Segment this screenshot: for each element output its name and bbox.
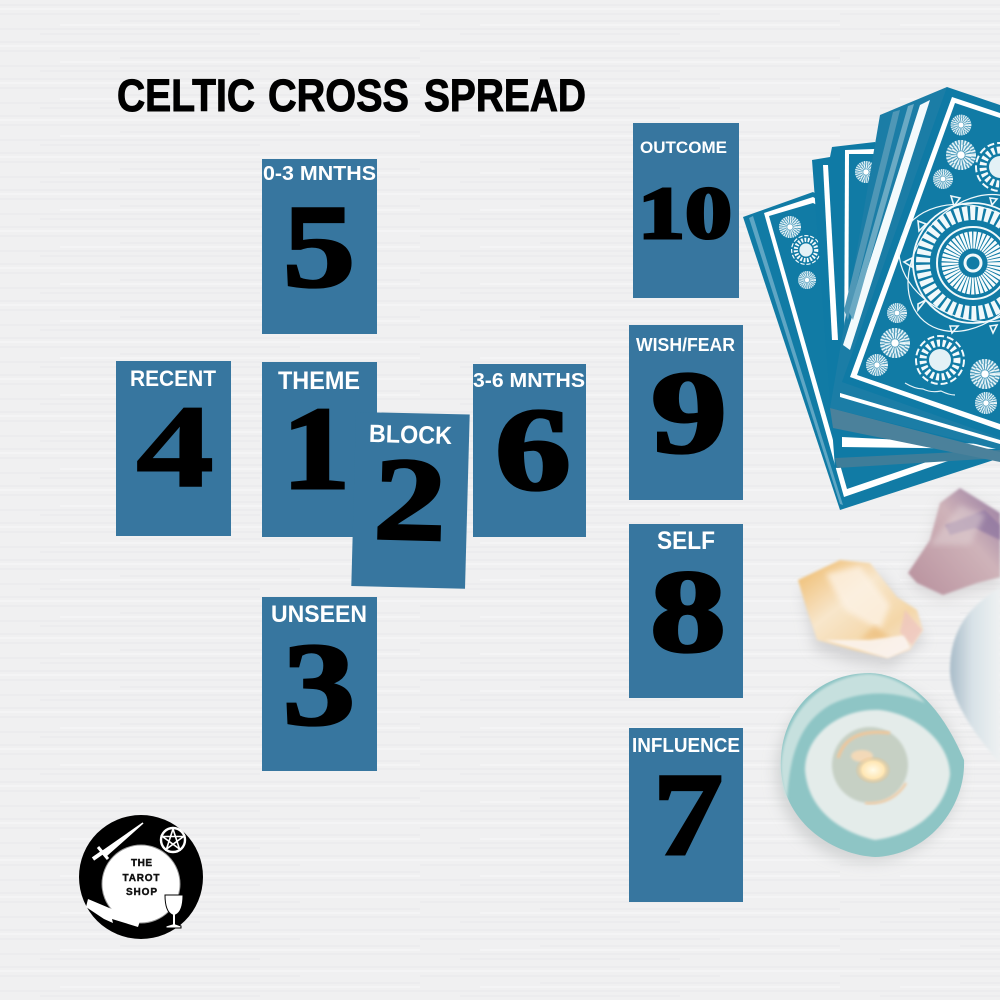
card 4: recent	[116, 361, 231, 536]
label: RECENT	[130, 366, 217, 391]
card 5: 0-3 months	[262, 159, 377, 334]
logo text: THE	[131, 858, 152, 869]
number: 4	[136, 381, 214, 512]
card 1: theme	[262, 362, 377, 537]
number: 6	[495, 384, 571, 515]
logo text: SHOP	[126, 887, 157, 898]
deck: top card with mandala	[842, 87, 1000, 438]
deck: third fan stack	[830, 87, 1000, 462]
card 8: self	[629, 524, 743, 698]
title: CROSS	[268, 70, 409, 121]
label: SELF	[657, 527, 715, 555]
logo icon: chalice	[165, 895, 183, 928]
number: 9	[651, 347, 727, 478]
title: CELTIC	[117, 70, 255, 121]
photo: rose amethyst crystal	[908, 488, 1000, 600]
deck: bottom fan	[743, 192, 1000, 510]
logo icon: pentacle	[161, 828, 185, 852]
card 9: wish/fear	[629, 325, 743, 500]
label: UNSEEN	[271, 601, 367, 628]
logo text	[122, 858, 160, 898]
photo: citrine crystal	[798, 560, 925, 668]
label: OUTCOME	[640, 138, 727, 157]
number: 8	[650, 546, 726, 677]
title	[117, 70, 586, 121]
number: 7	[653, 749, 723, 880]
card 2: block, slightly rotated	[351, 412, 470, 589]
number: 2	[372, 433, 448, 566]
card 10: outcome	[633, 123, 739, 298]
label: BLOCK	[369, 420, 452, 450]
photo: lit candle	[776, 673, 964, 862]
logo text: TAROT	[122, 873, 160, 884]
deck: second fan	[812, 142, 1000, 468]
label: INFLUENCE	[632, 735, 740, 757]
card 6: 3-6 months	[473, 364, 586, 537]
logo icon: wand	[86, 899, 140, 927]
label: 3-6 MNTHS	[473, 370, 585, 392]
card 7: influence	[629, 728, 743, 902]
number: 3	[283, 619, 355, 750]
label: THEME	[278, 367, 360, 395]
photo: pale blue vase	[950, 588, 1000, 763]
tarot deck photo	[743, 87, 1000, 510]
number: 1	[282, 383, 350, 514]
title: SPREAD	[424, 70, 586, 121]
number: 10	[638, 173, 732, 255]
logo: the tarot shop	[79, 815, 203, 939]
number: 5	[283, 181, 355, 312]
card 3: unseen	[262, 597, 377, 771]
label: 0-3 MNTHS	[263, 163, 376, 185]
logo icon: sword	[93, 823, 143, 859]
label: WISH/FEAR	[636, 335, 735, 355]
